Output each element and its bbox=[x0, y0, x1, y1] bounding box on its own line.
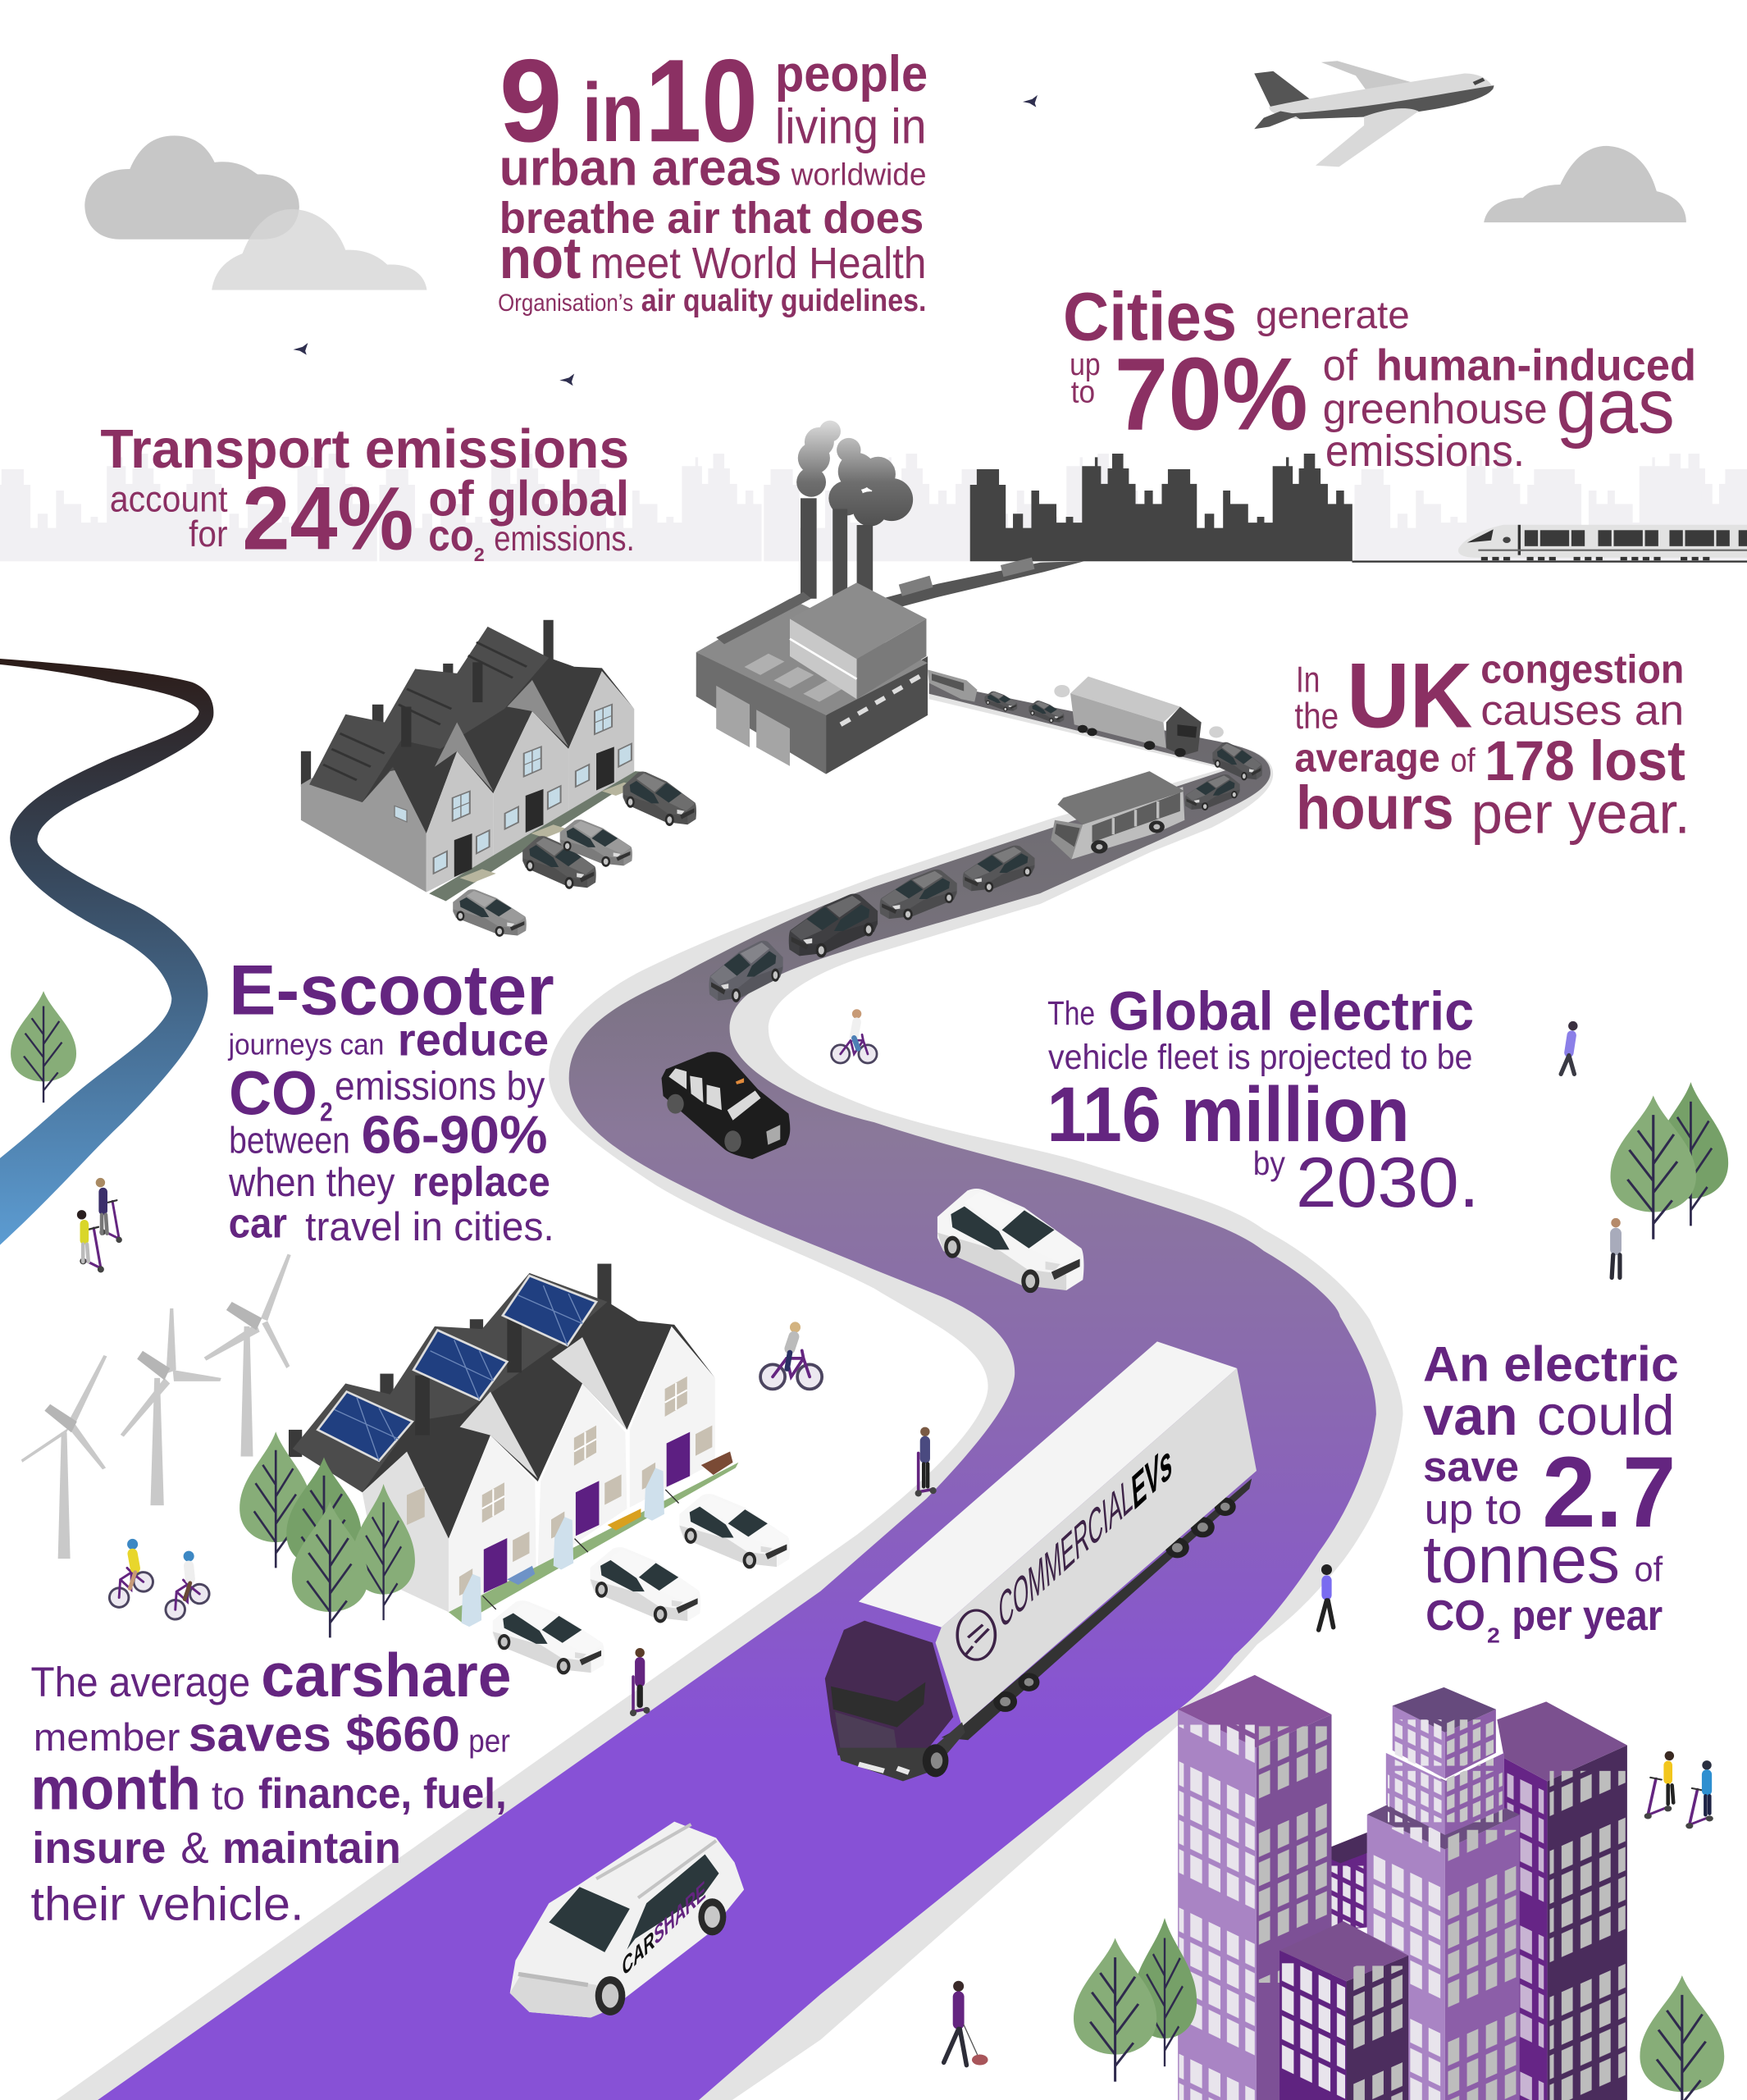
river bbox=[0, 659, 213, 1245]
bird bbox=[293, 343, 308, 355]
stat: electric van saves 2.7 tonnes: tonnes bbox=[1423, 1522, 1620, 1597]
black taxi bbox=[662, 1052, 790, 1159]
stat: UK congestion 178 lost hours: UK bbox=[1347, 644, 1472, 747]
stat: cities generate up to 70% bbox=[1063, 279, 1696, 476]
tall left tower bbox=[1178, 1675, 1332, 2100]
car bbox=[1185, 774, 1240, 810]
stat: carshare saving: insure bbox=[32, 1824, 166, 1873]
stat: 9 in 10 people: meet World Health bbox=[591, 239, 926, 288]
people: cyclist near bend bbox=[832, 1009, 877, 1063]
icon: high speed train bbox=[1458, 525, 1747, 559]
centre stepped tower bbox=[1367, 1687, 1520, 2100]
gray taxi bbox=[789, 893, 878, 957]
stat: electric van saves 2.7 tonnes: An electric bbox=[1423, 1335, 1679, 1391]
stat: transport emissions 24%: Transport emissions bbox=[100, 418, 629, 480]
lorry lettering: EVs: EVs bbox=[1129, 1432, 1174, 1521]
stat: carshare saving: member bbox=[34, 1716, 180, 1760]
stat: transport emissions 24%: 24% bbox=[242, 468, 413, 568]
wind turbines bbox=[21, 1254, 291, 1559]
car bbox=[984, 692, 1017, 711]
stat: cities generate up to 70%: generate bbox=[1256, 294, 1410, 337]
stat: e-scooter journeys: travel in cities. bbox=[305, 1205, 554, 1249]
stat: UK congestion 178 lost hours: congestion bbox=[1480, 648, 1684, 692]
stat: transport emissions 24%: 2 bbox=[474, 544, 485, 565]
cloud: lower left bbox=[212, 209, 426, 290]
stat: transport emissions 24%: co bbox=[428, 511, 474, 560]
stat: global electric vehicle fleet: 2030. bbox=[1296, 1144, 1480, 1222]
stat: cities generate up to 70%: emissions. bbox=[1325, 427, 1525, 476]
bird bbox=[1023, 95, 1038, 107]
stat: e-scooter journeys: between bbox=[229, 1120, 350, 1162]
road: grey shoulder bbox=[57, 682, 1403, 2100]
stat: cities generate up to 70%: up bbox=[1070, 347, 1101, 381]
stat: carshare saving: carshare bbox=[261, 1641, 511, 1710]
stat: e-scooter journeys: emissions by bbox=[335, 1064, 545, 1108]
lorry logo bbox=[957, 1610, 995, 1659]
dark city skyline bbox=[970, 454, 1352, 561]
stat: cities generate up to 70%: 70% bbox=[1115, 336, 1308, 451]
lorry bbox=[1054, 677, 1224, 757]
stat: carshare saving: finance, fuel, bbox=[258, 1770, 507, 1818]
stat: cities generate up to 70%: gas bbox=[1556, 363, 1675, 450]
stat: electric van saves 2.7 tonnes: 2.7 bbox=[1542, 1436, 1676, 1548]
electric lorry bbox=[825, 1341, 1257, 1781]
stat: 9 in 10 people: breathe air that does bbox=[499, 194, 924, 243]
stat: electric van saves 2.7 tonnes: up to bbox=[1425, 1486, 1522, 1533]
car bbox=[963, 846, 1035, 892]
tree: bottom right bbox=[1640, 1975, 1724, 2100]
road: distant road behind factory bbox=[877, 561, 1084, 610]
stat: carshare saving: their vehicle. bbox=[31, 1878, 304, 1930]
stat: e-scooter journeys: 2 bbox=[320, 1097, 333, 1127]
horizon line bbox=[1352, 560, 1747, 563]
stat: global electric vehicle fleet: Global electric bbox=[1108, 981, 1474, 1043]
car bbox=[880, 870, 957, 920]
stat: 9 in 10 people: living in bbox=[775, 98, 926, 154]
stat: UK congestion 178 lost hours: of bbox=[1450, 741, 1476, 778]
office buildings bbox=[1178, 1675, 1627, 2100]
bus bbox=[1051, 771, 1184, 859]
people: two scooter riders right bbox=[1644, 1751, 1713, 1828]
small bus bbox=[928, 669, 977, 702]
traffic queue on road bbox=[709, 669, 1262, 1002]
people: scooter rider by houses bbox=[630, 1648, 650, 1716]
smoke plumes bbox=[796, 421, 913, 527]
stat: electric van saves 2.7 tonnes: could bbox=[1537, 1384, 1675, 1447]
stat: carshare saving: per bbox=[468, 1724, 510, 1760]
lorry lettering: COMMERCIAL bbox=[997, 1465, 1134, 1640]
people: two scooter riders left bbox=[77, 1178, 122, 1272]
stat: e-scooter journeys: reduce bbox=[398, 1015, 549, 1066]
trees: right side bbox=[1611, 1082, 1728, 1239]
stat: global electric vehicle fleet: vehicle fleet is projected to be bbox=[1048, 1038, 1472, 1076]
stat: transport emissions 24%: emissions. bbox=[494, 519, 635, 558]
stat: UK congestion 178 lost hours: the bbox=[1294, 696, 1339, 737]
trees beside buildings bbox=[1074, 1918, 1197, 2082]
stat: 9 in 10 people: air quality guidelines. bbox=[641, 283, 926, 317]
stat: e-scooter journeys: journeys can bbox=[228, 1028, 384, 1061]
chimneys bbox=[801, 498, 873, 603]
car bbox=[709, 941, 783, 1002]
trees beside eco houses bbox=[239, 1431, 415, 1637]
car bbox=[1212, 742, 1262, 781]
stat: UK congestion 178 lost hours bbox=[1294, 644, 1690, 846]
stat: electric van saves 2.7 tonnes: 2 bbox=[1487, 1623, 1500, 1647]
carshare car bbox=[510, 1822, 744, 2018]
stat: 9 in 10 people bbox=[498, 35, 928, 317]
stat: cities generate up to 70%: Cities bbox=[1063, 279, 1237, 355]
stat: transport emissions 24%: account bbox=[110, 480, 227, 520]
distant lorries bbox=[899, 558, 1034, 596]
stat: transport emissions 24% bbox=[100, 418, 635, 568]
stat: UK congestion 178 lost hours: 178 lost bbox=[1485, 729, 1685, 792]
stat: transport emissions 24%: of global bbox=[428, 471, 629, 527]
stat: cities generate up to 70%: to bbox=[1071, 375, 1095, 409]
grey terraced houses and cars bbox=[301, 620, 696, 937]
background: pale city skyline bbox=[0, 454, 1747, 561]
stat: 9 in 10 people: people bbox=[775, 46, 928, 103]
stat: carshare saving: month bbox=[31, 1755, 201, 1823]
stat: electric van saves 2.7 tonnes: van bbox=[1423, 1386, 1518, 1447]
people: dog walker bbox=[944, 1981, 988, 2066]
stat: 9 in 10 people: urban areas bbox=[499, 139, 782, 196]
stat: UK congestion 178 lost hours: causes an bbox=[1480, 687, 1684, 734]
stat: global electric vehicle fleet: by bbox=[1253, 1144, 1285, 1182]
stat: electric van saves 2.7 tonnes: per year bbox=[1512, 1592, 1663, 1640]
stat: global electric vehicle fleet: 116 million bbox=[1047, 1071, 1410, 1158]
people: walker with phone bbox=[1561, 1021, 1578, 1074]
stat: e-scooter journeys: E-scooter bbox=[229, 952, 554, 1030]
carshare lettering: CAR: CAR bbox=[622, 1924, 655, 1982]
carshare lettering: SHARE: SHARE bbox=[654, 1875, 706, 1951]
stat: electric van saves 2.7 tonnes: CO bbox=[1425, 1592, 1485, 1640]
road: purple carriageway with gradient bbox=[98, 682, 1376, 2100]
stat: e-scooter journeys: 66-90% bbox=[362, 1105, 548, 1165]
stat: 9 in 10 people: 10 bbox=[645, 35, 758, 167]
stat: e-scooter journeys: CO bbox=[229, 1058, 317, 1127]
stat: carshare saving: & bbox=[180, 1824, 209, 1873]
stat: cities generate up to 70%: greenhouse bbox=[1323, 386, 1548, 433]
right dark tower bbox=[1497, 1701, 1627, 2100]
eco houses with solar panels bbox=[289, 1264, 790, 1674]
stat: electric van saves 2.7 tonnes bbox=[1423, 1335, 1679, 1647]
tree: left of river bbox=[11, 991, 76, 1102]
people: walker by buildings bbox=[1319, 1564, 1334, 1630]
stat: global electric vehicle fleet: The bbox=[1047, 994, 1095, 1032]
people: cyclist above road bbox=[760, 1322, 822, 1389]
cloud: upper left bbox=[84, 135, 299, 240]
stat: cities generate up to 70%: of bbox=[1323, 341, 1358, 390]
stat: UK congestion 178 lost hours: average bbox=[1294, 736, 1440, 780]
stat: global electric vehicle fleet bbox=[1047, 981, 1480, 1222]
cloud: upper right bbox=[1484, 146, 1686, 222]
people: scooter rider on shoulder bbox=[915, 1427, 937, 1496]
back low block bbox=[1316, 1833, 1367, 1933]
stat: e-scooter journeys bbox=[228, 952, 554, 1249]
stat: e-scooter journeys: replace bbox=[413, 1158, 550, 1205]
people: man looking at phone bbox=[1611, 1218, 1621, 1278]
people: two cyclists by turbines bbox=[100, 1539, 213, 1623]
stat: carshare saving: to bbox=[212, 1774, 245, 1819]
stat: carshare saving: maintain bbox=[222, 1824, 401, 1873]
icon: airplane bbox=[1254, 61, 1494, 167]
stat: electric van saves 2.7 tonnes: of bbox=[1635, 1550, 1663, 1589]
stat: 9 in 10 people: in bbox=[582, 66, 644, 159]
stat: carshare saving bbox=[31, 1641, 511, 1930]
car bbox=[1029, 701, 1064, 723]
stat: UK congestion 178 lost hours: per year. bbox=[1471, 781, 1690, 846]
stat: 9 in 10 people: worldwide bbox=[791, 157, 926, 191]
stat: UK congestion 178 lost hours: In bbox=[1296, 660, 1320, 701]
bird bbox=[559, 374, 574, 386]
front low tower bbox=[1279, 1921, 1408, 2100]
stat: transport emissions 24%: for bbox=[189, 514, 227, 555]
stat: 9 in 10 people: 9 bbox=[499, 35, 563, 167]
stat: 9 in 10 people: not bbox=[499, 226, 581, 291]
stat: carshare saving: The average bbox=[31, 1659, 250, 1705]
stat: electric van saves 2.7 tonnes: save bbox=[1423, 1444, 1519, 1491]
stat: e-scooter journeys: when they bbox=[228, 1161, 395, 1205]
stat: UK congestion 178 lost hours: hours bbox=[1296, 774, 1454, 842]
stat: cities generate up to 70%: human-induced bbox=[1376, 341, 1696, 390]
white car bbox=[937, 1189, 1083, 1293]
factory with chimneys and smoke bbox=[696, 421, 928, 774]
stat: carshare saving: saves $660 bbox=[189, 1705, 460, 1761]
stat: 9 in 10 people: Organisation’s bbox=[498, 290, 633, 317]
stat: e-scooter journeys: car bbox=[229, 1200, 287, 1247]
